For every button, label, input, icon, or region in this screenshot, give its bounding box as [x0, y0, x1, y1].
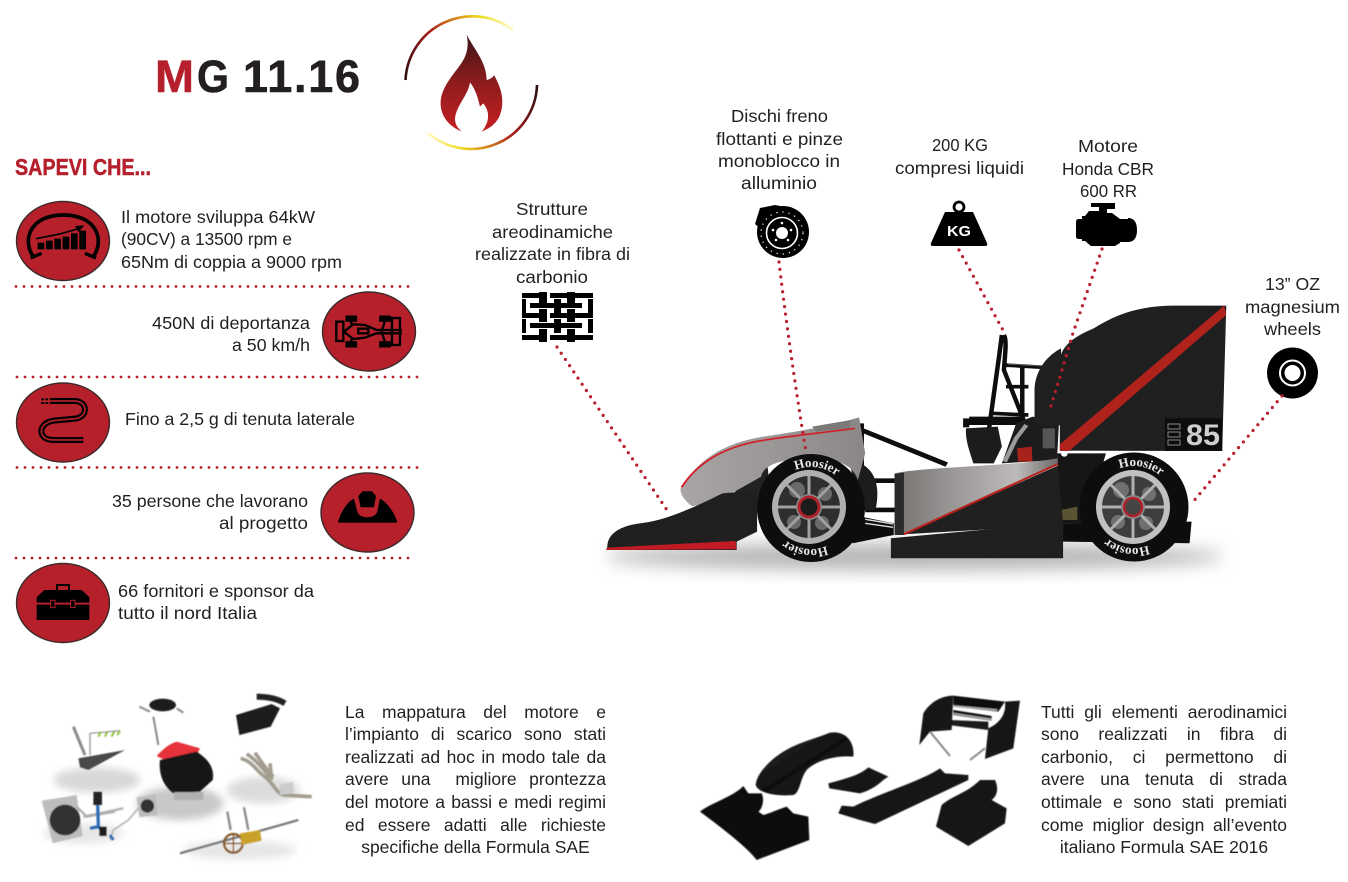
text: suppliers	[118, 581, 314, 623]
label	[1062, 136, 1154, 201]
label: 13” OZ	[1265, 274, 1320, 294]
number plate text: 85	[1186, 419, 1220, 452]
text: engine power	[121, 207, 342, 272]
text: team: al progetto	[219, 513, 308, 533]
callout: wheels	[1245, 274, 1340, 398]
icon: weight: KG	[947, 223, 971, 240]
fact: engine power	[16, 202, 342, 280]
text: downforce: a 50 km/h	[232, 335, 310, 355]
text block: aerodynamics: ottimale e sono stati premiati	[1041, 792, 1287, 812]
heading: sapevi che: SAPEVI CHE...	[15, 154, 151, 180]
text block: aerodynamics: italiano Formula SAE 2016	[1060, 837, 1268, 857]
text block: aerodynamics: carbonio, ci permettono di	[1041, 747, 1287, 767]
text block: engine mapping: La mappatura del motore e	[345, 702, 606, 722]
fact: team	[112, 473, 414, 552]
label: magnesium	[1245, 297, 1340, 317]
icon: engine	[1076, 203, 1137, 246]
label: compresi liquidi	[895, 158, 1024, 178]
rear wheel: Hoosier	[1118, 458, 1164, 475]
label: Honda CBR	[1062, 159, 1154, 179]
text: engine power: (90CV) a 13500 rpm e	[121, 229, 292, 249]
title: 11.16	[243, 51, 360, 102]
text block: aerodynamics: come miglior design all’evento	[1041, 815, 1287, 835]
callout: carbon structures	[475, 199, 630, 342]
text: team: 35 persone che lavorano	[112, 491, 308, 511]
fact: lateral grip	[16, 383, 355, 462]
rear wheel	[1080, 452, 1188, 562]
label: areodinamiche	[492, 222, 613, 242]
title	[155, 51, 360, 102]
image: engine parts	[42, 697, 312, 859]
leader lines	[557, 249, 1282, 513]
fact: suppliers	[16, 564, 314, 642]
fact: downforce	[152, 292, 416, 371]
front wheel: Hoosier	[793, 459, 840, 475]
text: engine power: 65Nm di coppia a 9000 rpm	[121, 252, 342, 272]
callout: engine	[1062, 136, 1154, 246]
label	[716, 106, 843, 193]
title: M	[155, 51, 194, 102]
front wheel: Hoosier	[782, 541, 829, 557]
text block: aerodynamics: avere una tenuta di strada	[1041, 769, 1287, 789]
text: suppliers: 66 fornitori e sponsor da	[118, 581, 314, 601]
text: downforce	[152, 313, 310, 355]
logo: flame in ring	[406, 16, 537, 149]
text: lateral grip: Fino a 2,5 g di tenuta laterale	[125, 409, 355, 429]
front wheel	[757, 454, 865, 562]
label	[1245, 274, 1340, 339]
rear wheel: Hoosier	[1104, 539, 1150, 556]
text block: engine mapping: l’impianto di scarico sono stati	[345, 724, 606, 744]
label: Dischi freno	[731, 106, 828, 126]
icon: carbon weave	[522, 292, 593, 342]
text block: aerodynamics: Tutti gli elementi aerodinamici	[1041, 702, 1287, 722]
callout: weight	[895, 135, 1024, 246]
icon: race track	[16, 383, 110, 462]
text: engine power: Il motore sviluppa 64kW	[121, 207, 315, 227]
label: wheels	[1263, 319, 1321, 339]
label: Motore	[1078, 136, 1138, 156]
label: Strutture	[516, 199, 588, 219]
text: team	[112, 491, 308, 533]
icon: car top view	[322, 292, 416, 371]
label	[895, 135, 1024, 178]
icon: brake disc	[755, 205, 809, 258]
text block: engine mapping: realizzati ad hoc in modo tale da	[345, 747, 606, 767]
callout: brakes	[716, 106, 843, 258]
text block: engine mapping: specifiche della Formula SAE	[361, 837, 590, 857]
text: suppliers: tutto il nord Italia	[118, 603, 257, 623]
text block: aerodynamics: sono realizzati in fibra di	[1041, 724, 1287, 744]
image: carbon aero parts	[700, 696, 1020, 860]
label: monoblocco in	[718, 151, 840, 171]
car	[605, 306, 1226, 580]
text block: engine mapping: ed essere adatti alle richieste	[345, 815, 606, 835]
text block: engine mapping: del motore a bassi e medi regimi	[345, 792, 606, 812]
icon: wheel	[1267, 348, 1318, 398]
label: 600 RR	[1080, 181, 1137, 201]
text block: engine mapping: avere una migliore prontezza	[345, 769, 606, 789]
icon: toolbox	[16, 564, 110, 642]
icon: hard hat	[321, 473, 414, 552]
label: flottanti e pinze	[716, 129, 843, 149]
label: carbonio	[516, 267, 588, 287]
label: alluminio	[741, 173, 817, 193]
text: downforce: 450N di deportanza	[152, 313, 310, 333]
icon: gauge	[16, 202, 110, 280]
label	[475, 199, 630, 287]
panel: sapevi che facts	[16, 202, 418, 642]
title: G	[197, 51, 229, 102]
text block: engine mapping	[345, 702, 606, 857]
text block: aerodynamics	[1041, 702, 1287, 857]
label: realizzate in fibra di	[475, 244, 630, 264]
label: 200 KG	[932, 135, 988, 155]
